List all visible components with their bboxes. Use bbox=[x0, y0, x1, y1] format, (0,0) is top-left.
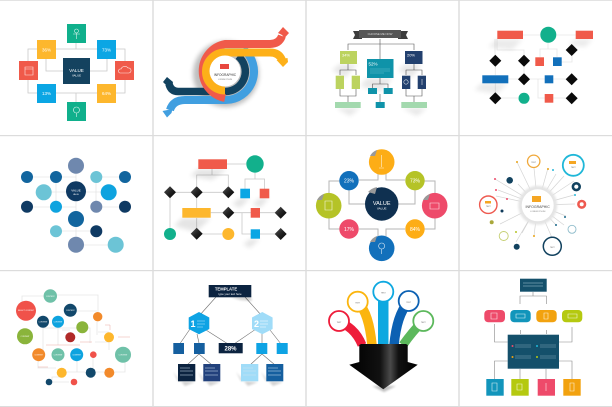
center value square: VALUE bbox=[69, 68, 84, 73]
shadows bbox=[173, 297, 283, 386]
center infographic label: INFOGRAPHIC bbox=[214, 73, 237, 77]
panel: template tree bbox=[173, 285, 288, 386]
light hexagon 2: 2 bbox=[254, 319, 259, 329]
shadows bbox=[332, 64, 427, 116]
navy 20% box: 20% bbox=[407, 52, 415, 58]
28% box: 28% bbox=[224, 346, 237, 352]
panel: ribbon flowchart bbox=[332, 30, 427, 116]
right pink circle bbox=[422, 193, 448, 218]
panel: arrow with circles bbox=[329, 282, 433, 392]
template title: TEMPLATE bbox=[215, 286, 237, 292]
panel: round value diagram bbox=[316, 149, 448, 261]
teal small boxes bbox=[368, 88, 393, 108]
cyan ring: TEXT bbox=[571, 167, 576, 169]
green sub boxes bbox=[336, 76, 360, 89]
center value square bbox=[63, 58, 90, 84]
template title: type your text here bbox=[218, 292, 242, 296]
blue process rectangle bbox=[482, 75, 508, 83]
orange 64% square: 64% bbox=[102, 91, 111, 96]
right red square bbox=[115, 61, 134, 80]
bubble captions: CONTENT bbox=[66, 310, 76, 312]
bubble captions: SELECT CONTENT bbox=[18, 310, 35, 312]
panel: flow with pills bbox=[484, 279, 582, 396]
red small rectangle bbox=[576, 31, 593, 39]
bubble captions bbox=[18, 296, 128, 356]
network nodes bbox=[21, 158, 131, 253]
green circle: TEXT bbox=[421, 322, 426, 324]
shadows bbox=[474, 39, 593, 94]
panel: square value diagram bbox=[19, 24, 134, 121]
green start circle bbox=[540, 27, 556, 43]
ray dots bbox=[494, 161, 576, 237]
teal 52% box: 52% bbox=[368, 62, 378, 66]
green end circle bbox=[518, 93, 530, 104]
panel: coloured flowchart bbox=[164, 155, 287, 248]
bottom blue circle bbox=[369, 236, 395, 261]
black arrow bbox=[349, 344, 418, 392]
dark blue band bbox=[394, 301, 409, 345]
bubble captions: CONTENT bbox=[119, 354, 128, 356]
panel: radial infographic bbox=[480, 155, 585, 255]
red rectangle bbox=[198, 159, 227, 169]
red process rectangle bbox=[497, 31, 523, 39]
center value circle: VALUE bbox=[71, 188, 81, 192]
green circle bbox=[246, 155, 264, 173]
center value square: VALUE bbox=[72, 74, 81, 78]
navy dot bbox=[514, 244, 520, 250]
center infographic label: LOREM IPSUM bbox=[218, 79, 232, 81]
panel: circle network bbox=[21, 158, 131, 253]
bubbles bbox=[16, 289, 131, 385]
shadows bbox=[174, 169, 269, 248]
blue 13% square: 13% bbox=[42, 91, 51, 96]
yellow ribbon bbox=[206, 52, 288, 90]
lime 73% circle: 73% bbox=[410, 178, 421, 184]
bubble captions: CONTENT bbox=[54, 354, 63, 356]
red and blue squares bbox=[535, 57, 562, 103]
blue ribbon bbox=[162, 49, 254, 118]
lime outline ring bbox=[499, 232, 508, 240]
left red square bbox=[19, 61, 38, 80]
yellow circle: TEXT bbox=[355, 302, 361, 304]
right icon squares bbox=[256, 343, 288, 354]
bubble captions: CONTENT bbox=[21, 336, 30, 338]
central hub: INFOGRAPHIC bbox=[526, 205, 550, 209]
pink 17% circle: 17% bbox=[344, 227, 355, 233]
blue 73% square: 73% bbox=[102, 48, 111, 52]
olive dot bbox=[490, 220, 494, 224]
bubble captions: CONTENT bbox=[34, 354, 44, 356]
yellow rectangle bbox=[182, 208, 211, 218]
dark blue circle: TEXT bbox=[406, 302, 412, 304]
top orange circle bbox=[369, 149, 395, 175]
blue hexagon 1: 1 bbox=[190, 319, 196, 329]
red ribbon bbox=[203, 27, 289, 98]
decision diamonds bbox=[489, 44, 578, 104]
text cards bbox=[178, 364, 283, 381]
center value circle: VALUE bbox=[373, 201, 391, 207]
main dark box bbox=[508, 335, 559, 369]
green band bbox=[403, 321, 423, 345]
navy target bbox=[573, 183, 580, 190]
cyan circle: TEXT bbox=[381, 292, 386, 294]
left lime circle bbox=[316, 193, 342, 218]
bottom green square bbox=[67, 102, 86, 121]
panel: ribbon swirl bbox=[162, 27, 289, 118]
red circle: TEXT bbox=[337, 322, 342, 324]
orange 84% circle: 84% bbox=[410, 227, 421, 233]
title ribbon: CHOOSE ME NOW bbox=[368, 32, 393, 36]
bubble captions: CONTENT bbox=[72, 354, 82, 356]
center value circle: VALUE bbox=[377, 206, 387, 210]
bottom squares bbox=[486, 379, 581, 396]
panel: flat flowchart black diamonds bbox=[474, 27, 593, 104]
orange pill bbox=[536, 310, 557, 322]
navy ring: TEXT bbox=[550, 247, 555, 249]
orange 36% square: 36% bbox=[42, 48, 51, 52]
central hub: LOREM IPSUM bbox=[530, 211, 546, 213]
center value circle bbox=[365, 187, 398, 221]
blue pill bbox=[510, 310, 531, 322]
navy small dot bbox=[506, 177, 513, 184]
blue 23% circle: 23% bbox=[344, 178, 355, 184]
top box bbox=[520, 279, 547, 292]
navy sub boxes bbox=[402, 76, 426, 89]
bubble captions: CONTENT bbox=[39, 322, 48, 324]
central hub bbox=[518, 186, 557, 225]
light green bars bbox=[335, 102, 427, 108]
decision diamonds bbox=[164, 186, 287, 240]
orange ring: TEXT bbox=[531, 162, 537, 164]
template title bbox=[209, 285, 251, 297]
center value circle: VALUE bbox=[73, 193, 80, 196]
cyan band bbox=[378, 292, 388, 346]
top green square bbox=[67, 24, 86, 43]
blue outline ring bbox=[568, 225, 576, 233]
panel: bubble flow map bbox=[16, 289, 131, 385]
yellow band bbox=[358, 302, 372, 345]
green 34% box: 34% bbox=[342, 52, 350, 58]
bubble captions: CONTENT bbox=[54, 322, 63, 324]
bubble captions: CONTENT bbox=[46, 296, 56, 298]
red band bbox=[339, 321, 362, 345]
squares bbox=[240, 189, 269, 239]
red target bbox=[578, 201, 585, 208]
center infographic label bbox=[210, 56, 240, 86]
lime pill bbox=[562, 310, 582, 322]
left icon squares bbox=[173, 343, 205, 354]
navy ribbon bbox=[163, 56, 245, 92]
end circles bbox=[164, 228, 234, 240]
red ring: TEXT bbox=[486, 206, 491, 208]
pink pill bbox=[484, 310, 505, 322]
center value circle bbox=[66, 181, 86, 201]
